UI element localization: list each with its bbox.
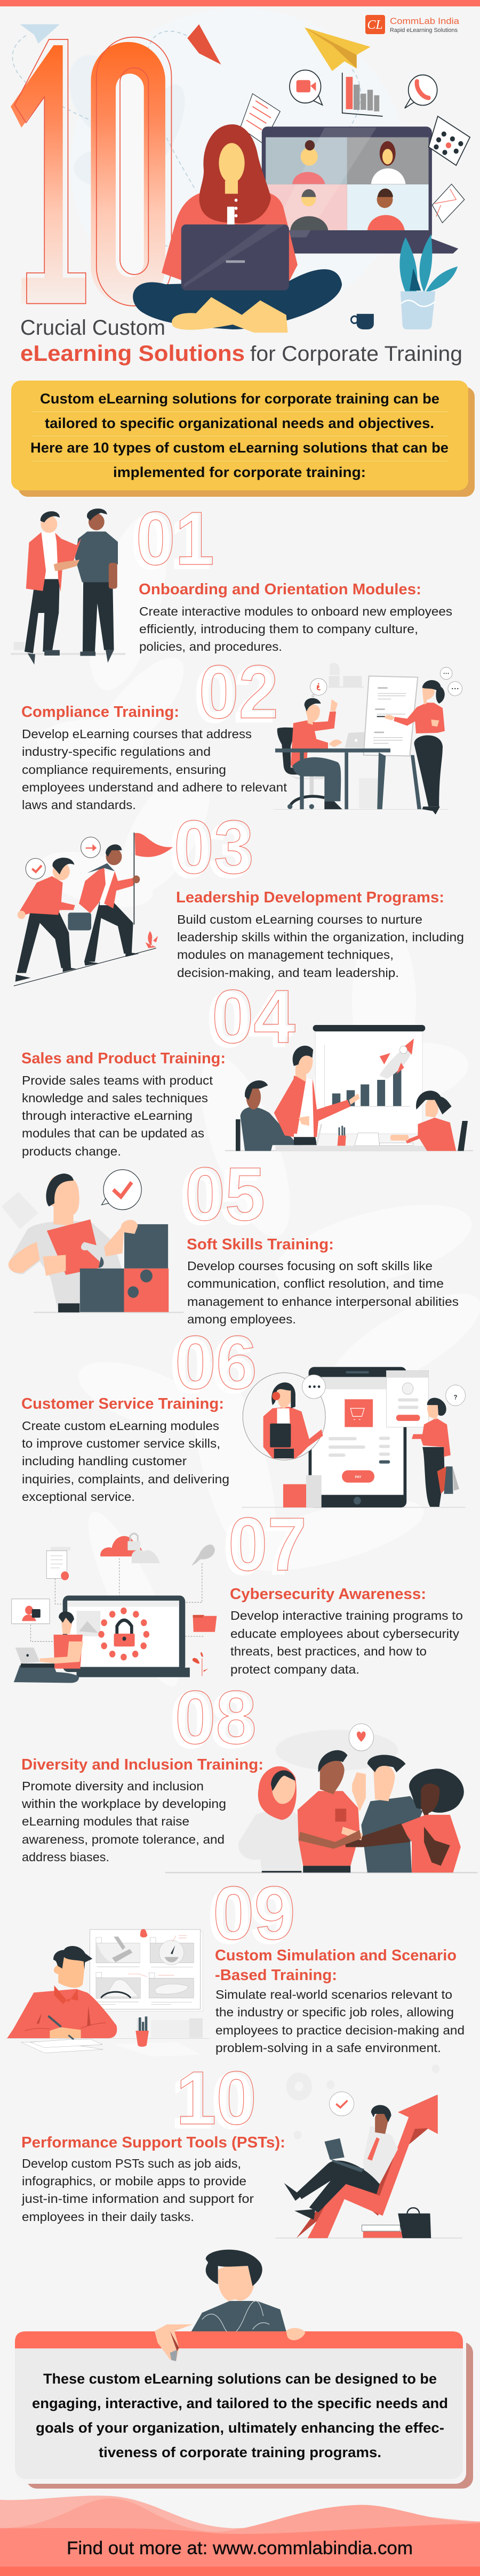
icon: video bubble [290,70,322,105]
body 04 [22,1073,213,1158]
footer link: Find out more at: www.commlabindia.com [67,2538,413,2558]
panel: section 01 [11,496,452,665]
panel: section 08 [21,1675,477,1874]
number 04: 04 [212,974,295,1059]
icon: plant [399,234,458,329]
body 03: modules on management techniques, [177,948,394,962]
logo: CL [367,18,383,32]
body 01: Create interactive modules to onboard new employees [139,604,452,618]
illustration: team with flag [14,833,173,986]
body 08: eLearning modules that raise [22,1814,189,1828]
heading 01: Onboarding and Orientation Modules: [139,581,421,598]
number 05: 05 [185,1152,265,1237]
body 03 [177,912,464,980]
panel: section 02 [21,650,462,814]
body 02: employees understand and adhere to relevant [22,780,287,794]
body 08: Promote diversity and inclusion [22,1779,204,1793]
top bar [0,0,480,6]
body 07: Develop interactive training programs to [230,1609,463,1622]
body 07: educate employees about cybersecurity [230,1627,459,1641]
logo [365,15,460,34]
number 10: 10 [172,2059,252,2144]
body 06: exceptional service. [22,1490,135,1504]
number 09: 09 [213,1871,295,1956]
heading 03: Leadership Development Programs: [176,889,444,906]
panel: section 10 [21,2056,462,2239]
heading 05: Soft Skills Training: [187,1236,334,1253]
number 02: 02 [199,650,278,734]
logo: Rapid eLearning Solutions [390,27,458,34]
callout text: engaging, interactive, and tailored to the specific needs and [32,2395,448,2411]
body 06: inquiries, complaints, and delivering [22,1472,229,1486]
body 05: management to enhance interpersonal abilities [187,1295,459,1309]
number 01: 01 [132,499,210,584]
body 07: protect company data. [230,1662,359,1676]
body 09 [215,1988,465,2055]
panel: closing callout [15,2250,473,2489]
body 05: Develop courses focusing on soft skills like [187,1259,433,1273]
body 03: leadership skills within the organization, including [177,930,464,944]
number 09: 09 [209,1874,291,1959]
heading 02: Compliance Training: [21,704,179,721]
body 07: threats, best practices, and how to [230,1644,427,1658]
callout person [191,2250,286,2334]
body 10 [21,2157,254,2224]
icon: calendar [429,116,470,165]
illustration: handshake [11,508,125,665]
body 06: including handling customer [22,1454,187,1468]
heading 09: Custom Simulation and Scenario [215,1947,457,1964]
body 08: address biases. [22,1850,109,1864]
icon: document [241,94,280,144]
callout text [32,2371,448,2460]
panel: intro callout: Here are 10 types of custom eLearning solutions that can be [30,440,449,456]
heading 09: -Based Training: [215,1967,337,1984]
number 05: 05 [181,1155,261,1240]
body 05: among employees. [187,1312,296,1326]
callout text: tiveness of corporate training programs. [99,2444,381,2460]
body 02: Develop eLearning courses that address [22,727,252,741]
body 08: within the workplace by developing [21,1797,226,1811]
panel: section 07 [12,1502,463,1683]
number 02: 02 [195,653,274,738]
body 10: employees in their daily tasks. [22,2210,194,2224]
big 10 [11,37,171,306]
illustration: puzzle [2,1169,183,1313]
body 10: Develop custom PSTs such as job aids, [22,2157,241,2170]
panel: intro callout: implemented for corporate training: [113,464,366,480]
title: for Corporate Training [250,342,462,366]
body 07 [230,1609,463,1676]
illustration: tablet shopping: ? [454,1394,458,1401]
heading 10: Performance Support Tools (PSTs): [21,2134,285,2151]
illustration: growth arrow [276,2064,462,2239]
illustration: classroom [274,663,462,814]
body 04: products change. [22,1144,121,1158]
body 04: Provide sales teams with product [22,1073,213,1087]
illustration: cyber laptop [12,1533,217,1683]
logo: CommLab India [390,16,460,26]
body 05: communication, conflict resolution, and time [187,1277,444,1290]
number 06: 06 [171,1323,253,1408]
panel: section 06 [21,1320,465,1508]
laptop with video call [262,127,458,254]
body 02 [22,727,287,812]
number 10: 10 [176,2056,257,2141]
icon: phone bubble [405,75,437,108]
icon: envelope [432,184,465,223]
illustration: tablet shopping: PAY [355,1475,362,1479]
number 01: 01 [136,496,214,581]
illustration: tablet shopping [242,1367,465,1508]
callout text: These custom eLearning solutions can be designed to be [43,2371,437,2387]
panel: section 04 [21,974,473,1158]
number 06: 06 [175,1320,257,1405]
body 09: employees to practice decision-making and [215,2023,465,2037]
body 02: compliance requirements, ensuring [22,763,226,777]
panel: intro callout [11,381,475,497]
body 03: Build custom eLearning courses to nurture [177,912,422,926]
heading 07: Cybersecurity Awareness: [230,1586,426,1603]
heading 08: Diversity and Inclusion Training: [21,1756,263,1773]
body 01: policies, and procedures. [139,640,282,653]
panel: intro callout: Custom eLearning solutions for corporate training can be [40,391,439,407]
heading 06: Customer Service Training: [21,1395,224,1412]
title [20,316,462,366]
number 08: 08 [175,1675,257,1760]
body 05 [187,1259,459,1326]
panel: intro callout: tailored to specific organizational needs and objectives. [45,415,434,431]
title: eLearning Solutions [20,341,245,366]
body 03: decision-making, and team leadership. [177,966,399,980]
body 08 [21,1779,226,1864]
body 02: industry-specific regulations and [22,745,211,758]
body 09: the industry or specific job roles, allowing [215,2005,454,2019]
number 03: 03 [170,808,250,893]
callout box [15,2331,473,2489]
body 01: efficiently, introducing them to company culture, [139,622,418,636]
illustration: storyboard [5,1929,210,2056]
body 06: Create custom eLearning modules [22,1419,219,1433]
heading 09 [215,1947,457,1984]
number 04: 04 [207,978,291,1062]
body 10: infographics, or mobile apps to provide [22,2174,246,2188]
body 08: awareness, promote tolerance, and [22,1832,225,1846]
illustration: sales presentation [225,1025,473,1151]
panel: section 03 [14,805,464,986]
body 02: laws and standards. [22,798,136,812]
panel: section 09 [5,1871,465,2056]
number 08: 08 [171,1678,252,1763]
paper planes [20,24,371,71]
body 04: knowledge and sales techniques [22,1091,208,1105]
title: Crucial Custom [20,316,165,340]
body 01 [139,604,452,653]
body 06: to improve customer service skills, [22,1436,220,1450]
number 03: 03 [174,805,254,890]
hero illustration [11,8,470,333]
body 09: Simulate real-world scenarios relevant to [215,1988,452,2001]
panel: section 05 [2,1152,459,1326]
icon: bar chart [342,72,383,116]
heading 04: Sales and Product Training: [21,1050,226,1067]
callout hands [155,2324,305,2361]
icon: coffee cup [351,314,374,329]
body 04: through interactive eLearning [22,1109,193,1123]
footer waves [0,2496,480,2576]
callout text: goals of your organization, ultimately enhancing the effec- [36,2420,444,2436]
illustration: diverse team [165,1724,477,1874]
body 10: just-in-time information and support for [21,2192,254,2206]
body 04: modules that can be updated as [22,1126,204,1140]
woman with laptop [133,124,342,333]
body 06 [22,1419,229,1504]
number 07: 07 [224,1505,302,1590]
number 07: 07 [228,1502,307,1587]
body 09: problem-solving in a safe environment. [215,2041,441,2055]
